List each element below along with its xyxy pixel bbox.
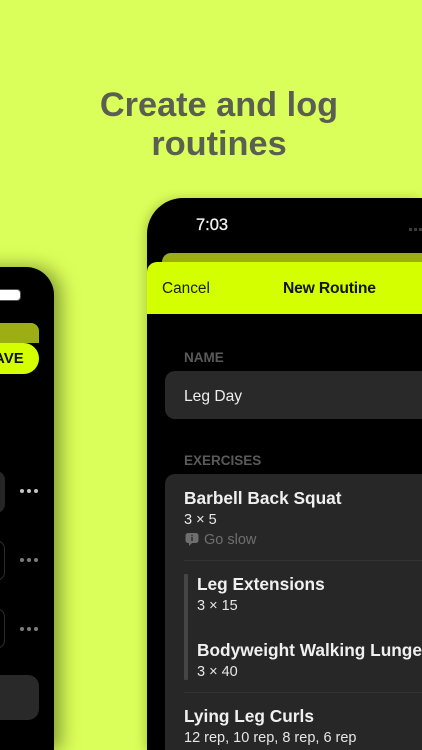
exercises panel — [165, 474, 422, 750]
sets rep list: 12 rep, 10 rep, 8 rep, 6 rep — [184, 730, 356, 746]
note text: Go slow — [204, 532, 256, 548]
sheet header — [147, 262, 422, 314]
exercise name: Lying Leg Curls: Lying Leg Curls — [184, 706, 314, 726]
save button — [0, 343, 39, 374]
phone: left — [0, 267, 54, 750]
phone: right — [147, 198, 422, 750]
status time: 7:03 — [196, 216, 228, 234]
divider — [184, 560, 422, 561]
dimmed sheet behind — [0, 323, 39, 343]
sets 3 x 5: 3 × 5 — [184, 512, 217, 528]
status dots — [409, 228, 422, 231]
exercise name: Leg Extensions: Leg Extensions — [197, 574, 325, 594]
title: Create and log — [100, 86, 338, 124]
exercises label: EXERCISES — [184, 453, 261, 468]
battery icon — [0, 289, 21, 301]
sets 3 x 40: 3 × 40 — [197, 664, 238, 680]
dimmed sheet behind — [162, 253, 422, 273]
divider — [184, 692, 422, 693]
exercise name: Barbell Back Squat: Barbell Back Squat — [184, 488, 342, 508]
exercise row 1 — [0, 471, 5, 513]
more dots 3 — [20, 627, 38, 631]
exercise row 3 — [0, 608, 5, 649]
name value: Leg Day — [184, 388, 242, 405]
title: routines — [151, 125, 287, 163]
sheet title: New Routine — [283, 280, 376, 297]
superset bar — [184, 574, 188, 680]
cancel: Cancel — [162, 280, 210, 297]
add button — [0, 675, 39, 720]
title — [100, 86, 338, 163]
more dots 1 — [20, 489, 38, 493]
name label: NAME — [184, 350, 224, 365]
exercise row 2 — [0, 540, 5, 581]
note icon — [186, 533, 198, 546]
name field — [165, 371, 422, 419]
more dots 2 — [20, 558, 38, 562]
sets 3 x 15: 3 × 15 — [197, 598, 238, 614]
